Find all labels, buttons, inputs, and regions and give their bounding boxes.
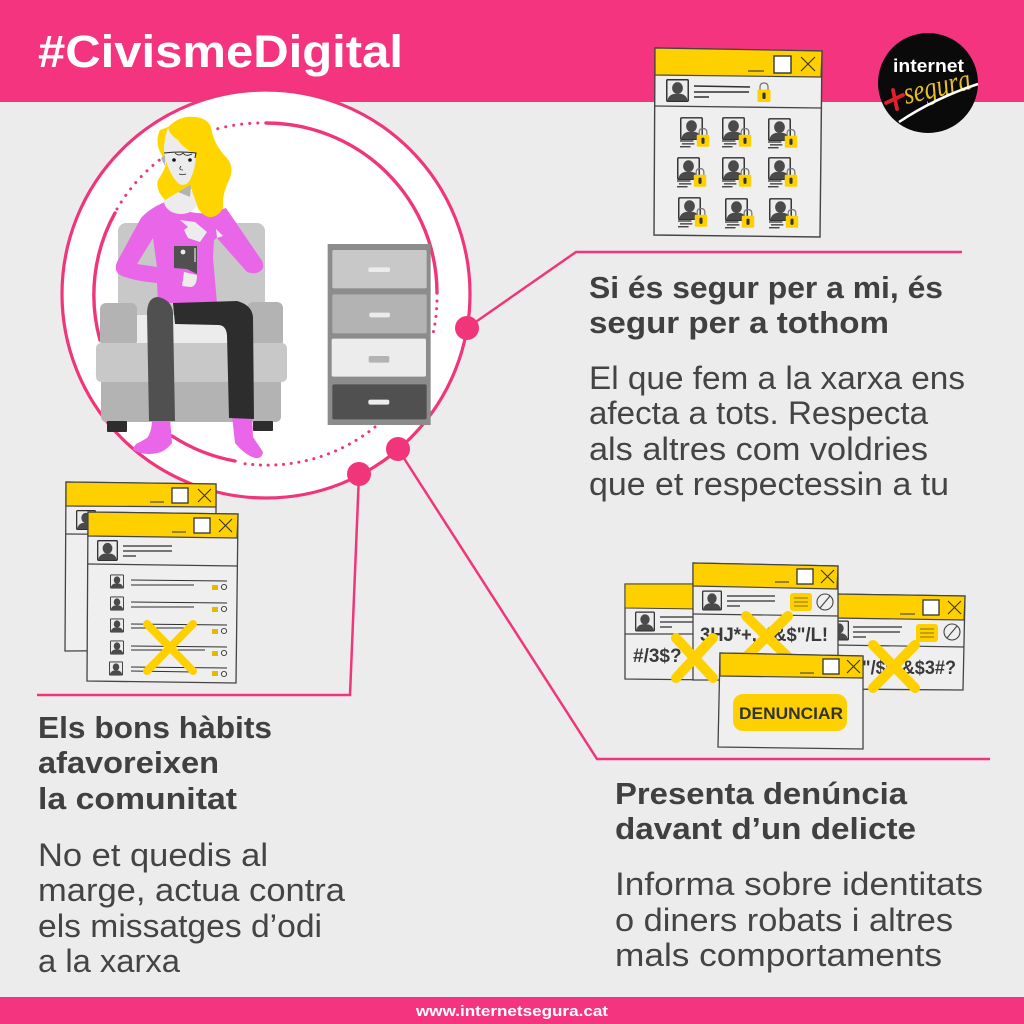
logo: internet + segura [878, 33, 978, 133]
title: #CivismeDigital [38, 26, 403, 77]
body text: good habits: No et quedis al [38, 837, 268, 873]
front window [87, 512, 238, 683]
centre window [693, 563, 838, 680]
window stack: report [625, 563, 965, 749]
body text: good habits: marge, actua contra [38, 872, 345, 908]
body text: safe for me: als altres com voldries [589, 431, 928, 467]
neck and chest [164, 188, 198, 214]
report button [733, 694, 847, 731]
body text: safe for me: afecta a tots. Respecta [589, 395, 928, 431]
heading: report a crime [615, 776, 916, 846]
body text: report a crime [615, 866, 983, 973]
heading: good habits: Els bons hàbits [38, 710, 272, 745]
right window [830, 594, 965, 690]
connector lines [37, 252, 990, 759]
woman [116, 117, 263, 458]
back window [65, 482, 216, 651]
body text: good habits [38, 837, 345, 979]
window stack: community comments [65, 482, 238, 683]
pointing hand [180, 220, 207, 242]
body text: report a crime: o diners robats i altres [615, 902, 953, 938]
main circle [62, 90, 470, 498]
heading: safe for me [589, 270, 943, 340]
yellow crosses [676, 616, 915, 688]
body text: good habits: a la xarxa [38, 943, 180, 979]
heading: good habits: afavoreixen [38, 745, 219, 780]
body text: safe for me: que et respectessin a tu [589, 466, 949, 502]
window: locked profiles [654, 48, 822, 237]
footer band [0, 997, 1024, 1024]
heading: report a crime: Presenta denúncia [615, 776, 908, 811]
filing cabinet [328, 244, 431, 425]
hair [157, 117, 232, 217]
left window: #/3$? [633, 646, 682, 667]
body text: good habits: els missatges d’odi [38, 908, 322, 944]
header band [0, 0, 1024, 102]
trousers [173, 301, 254, 419]
glasses and features [164, 152, 196, 174]
sweater [116, 202, 263, 303]
heading: good habits [38, 710, 272, 816]
inner ring [94, 123, 437, 465]
face [164, 128, 196, 185]
body text: safe for me [589, 360, 965, 502]
connector dots [347, 316, 479, 486]
heading: good habits: la comunitat [38, 781, 237, 816]
report button: DENUNCIAR [739, 704, 843, 723]
logo: internet + segura: segura [900, 61, 974, 111]
socks [133, 418, 172, 454]
footer url: www.internetsegura.cat [415, 1003, 608, 1020]
body text: report a crime: Informa sobre identitats [615, 866, 983, 902]
heading: report a crime: davant d’un delicte [615, 811, 916, 846]
left window [625, 584, 720, 680]
yellow cross [147, 624, 193, 671]
heading: safe for me: Si és segur per a mi, és [589, 270, 943, 305]
phone [174, 246, 197, 274]
body text: report a crime: mals comportaments [615, 937, 942, 973]
report window [718, 653, 863, 749]
right window: "/$%&$3#? [862, 658, 956, 679]
body text: safe for me: El que fem a la xarxa ens [589, 360, 965, 396]
illustration: armchair, woman and cabinet [96, 117, 431, 458]
logo: internet + segura: internet [893, 55, 964, 76]
centre window: 3HJ*+,%&$"/L! [700, 625, 828, 646]
armchair [96, 223, 287, 432]
heading: safe for me: segur per a tothom [589, 305, 889, 340]
